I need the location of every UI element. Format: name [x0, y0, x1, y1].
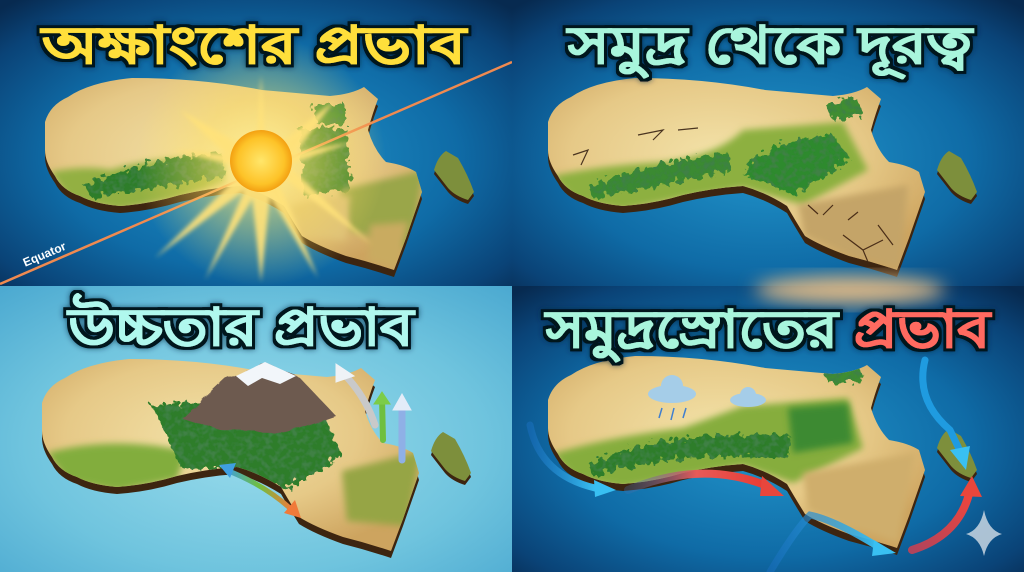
equator label: Equator	[21, 239, 68, 270]
sun with rays	[136, 36, 386, 286]
map: Africa with currents	[548, 356, 977, 555]
icon: rain clouds	[648, 375, 766, 420]
panel: altitude effect	[0, 286, 512, 572]
sandy blurred band at top	[755, 276, 945, 304]
panel: latitude effect	[0, 0, 512, 286]
arrows: ocean currents	[530, 360, 982, 572]
equator line	[0, 62, 512, 284]
panel: ocean current effect	[512, 276, 1024, 572]
icon: snow-capped mountain	[182, 362, 336, 432]
map: Africa with latitude vegetation	[45, 78, 474, 277]
panel: distance from sea	[512, 0, 1024, 286]
title: altitude effect: উচ্চতার প্রভাব	[66, 294, 416, 357]
arrows: rising air	[336, 364, 411, 460]
arrow: coastal gradient	[219, 463, 301, 518]
map: Africa inland dryness	[548, 78, 977, 277]
title: distance from sea: সমুদ্র থেকে দূরত্ব	[566, 17, 974, 80]
title: ocean current effect: সমুদ্রস্রোতের প্রভাব	[544, 301, 992, 363]
map: Africa with mountain	[42, 359, 471, 558]
icon: sparkle	[966, 510, 1002, 556]
title: latitude effect: অক্ষাংশের প্রভাব	[40, 17, 469, 75]
